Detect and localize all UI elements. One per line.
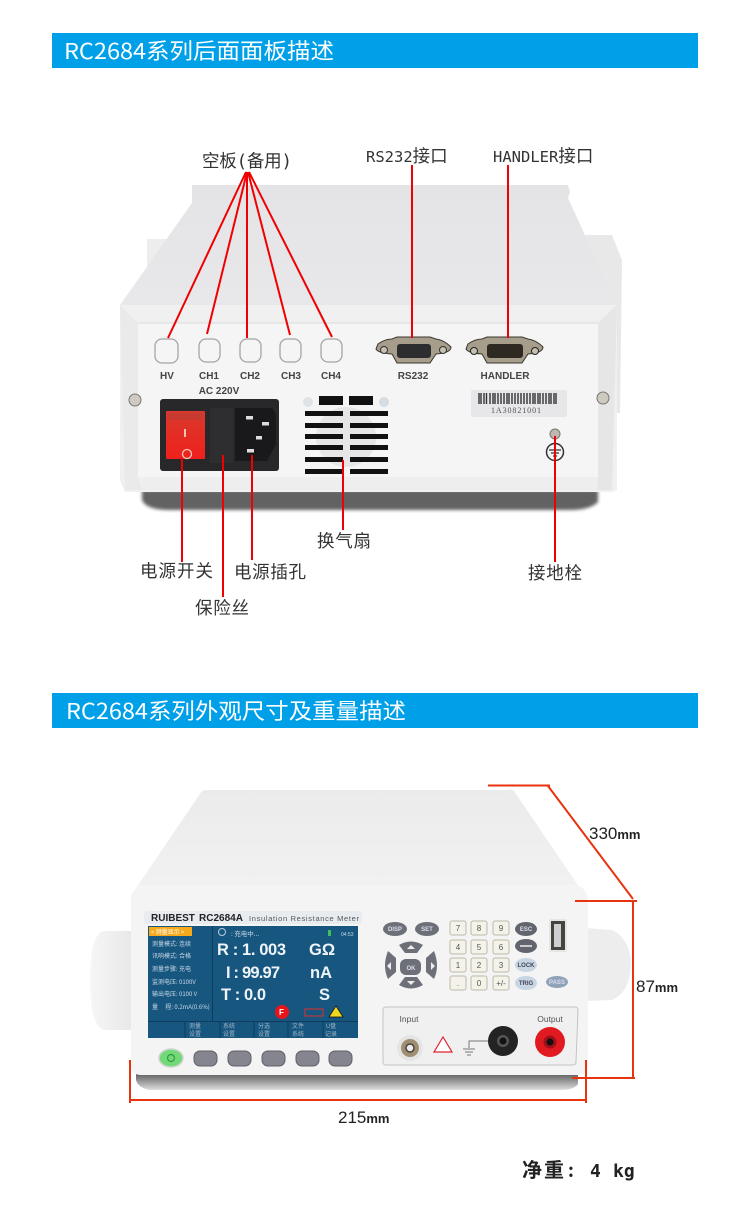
rear channel labels: CH4 (321, 371, 341, 382)
rear channel labels: CH3 (281, 371, 301, 382)
screen soft keys: U盘 (326, 1021, 336, 1030)
net weight: 4 (590, 1161, 601, 1182)
screen alarm icons (275, 1005, 343, 1019)
underside shadow (136, 1074, 578, 1090)
black terminal (488, 1026, 518, 1056)
screen soft keys: 系统 (223, 1021, 235, 1030)
rear view callout labels: 接地栓 (528, 564, 582, 584)
numeric keypad: 0 (477, 979, 482, 988)
power module (160, 399, 279, 471)
front face (120, 305, 617, 492)
rear view callout labels: 电源开关 (140, 562, 213, 582)
DISP and SET keys: DISP (388, 927, 402, 933)
rear view callout labels: 保险丝 (195, 599, 249, 619)
model strip: Insulation Resistance Meter (249, 914, 360, 923)
net weight: 净重 (522, 1154, 566, 1183)
numeric keypad: 7 (456, 924, 461, 933)
photo: instrument rear view (120, 185, 622, 510)
numeric keypad: +/- (496, 979, 506, 988)
rear channel labels: CH2 (240, 371, 260, 382)
top cover (120, 185, 617, 305)
screen soft keys: 记录 (325, 1029, 337, 1038)
rear channel labels: RS232 (398, 371, 429, 382)
rear channel labels: CH1 (199, 371, 219, 382)
ground symbol (463, 1041, 488, 1055)
screen side list: 量 程: 0.2mA(0.6%) (152, 1002, 210, 1011)
dimension labels (338, 824, 678, 1127)
red callout lines: rear view (168, 165, 555, 597)
numeric keypad: 1 (456, 961, 461, 970)
rear channel labels: HV (160, 371, 174, 382)
dimension lines (130, 786, 637, 1103)
right column keys: LOCK (518, 963, 535, 969)
right column keys: PASS (549, 980, 565, 986)
DISP and SET keys: SET (421, 927, 433, 933)
screen soft keys: 测量 (189, 1021, 201, 1030)
screen status line: 04:53 (341, 932, 354, 938)
numeric keypad: 3 (499, 961, 504, 970)
input/output panel: Output (537, 1014, 563, 1024)
numeric keypad: 5 (477, 943, 482, 952)
photo: instrument front view (90, 790, 631, 1090)
screen side list (152, 939, 210, 1011)
numeric keypad (450, 921, 509, 990)
underside shadow (142, 490, 598, 510)
dimension labels: 215mm (338, 1108, 390, 1127)
numeric keypad: . (457, 979, 459, 988)
rear view callout labels: 空板(备用) (202, 152, 292, 172)
dimension labels: 87mm (636, 977, 678, 996)
barcode label (471, 390, 567, 417)
ground terminal (546, 429, 564, 460)
screen soft keys: 系统 (292, 1029, 304, 1038)
numeric keypad: 8 (477, 924, 482, 933)
red terminal (535, 1027, 565, 1057)
net weight: kg (613, 1161, 635, 1182)
dimension labels: 330mm (589, 824, 640, 843)
RS232 connector (376, 337, 451, 363)
power button (159, 1049, 183, 1067)
LCD screen: < 测量显示 > (151, 927, 185, 936)
rear channel labels: AC 220V (199, 386, 240, 397)
screen soft keys (185, 1021, 337, 1038)
rear view callout labels: HANDLER接口 (493, 147, 593, 167)
screen side list: 讯响模式: 合格 (152, 951, 191, 960)
screen status tab (149, 927, 192, 936)
screen alarm icons: F (279, 1008, 284, 1017)
screen soft keys: 分选 (258, 1021, 270, 1030)
heading: rear panel (52, 33, 698, 68)
rear channel labels: HANDLER (481, 371, 530, 382)
screen readings (217, 941, 335, 1004)
numeric keypad: 9 (499, 924, 504, 933)
BNC input (397, 1035, 423, 1061)
screen side list: 测量模式: 连续 (152, 939, 191, 948)
screen side list: 输出电压: 0100 V (152, 989, 198, 998)
model strip: RC2684A (199, 913, 243, 924)
screen soft keys: 文件 (292, 1021, 304, 1030)
numeric keypad: 6 (499, 943, 504, 952)
rear view callout labels: RS232接口 (366, 147, 448, 167)
screen readings: I : 99.97 (226, 964, 280, 982)
LCD screen (148, 926, 358, 1038)
high voltage warning (434, 1037, 452, 1052)
net weight (522, 1154, 635, 1183)
connector holes (155, 339, 342, 363)
screen status line (218, 928, 354, 938)
top cover (130, 790, 586, 897)
heading: rear panel: RC2684系列后面面板描述 (64, 34, 334, 66)
right column keys: ESC (520, 927, 533, 933)
screen readings: R : 1. 003 (217, 941, 286, 959)
rear view callout labels (140, 147, 593, 619)
side handles (90, 931, 132, 1030)
screen side list: 测量步骤: 充电 (152, 964, 191, 973)
barcode label: 1A30821001 (491, 406, 541, 415)
heading: dimensions and weight (52, 693, 698, 728)
screen readings: GΩ (309, 941, 335, 959)
screen readings: nA (310, 964, 332, 982)
right column keys: TRIG (519, 981, 533, 987)
input/output panel: Input (400, 1014, 419, 1024)
rear handles (147, 239, 187, 279)
function buttons (194, 1051, 352, 1066)
screen soft keys: 设置 (223, 1029, 235, 1038)
rear view callout labels: 电源插孔 (234, 563, 306, 583)
input/output panel (383, 1007, 578, 1065)
USB port (549, 919, 567, 952)
screen readings: S (319, 986, 330, 1004)
rear channel labels (160, 371, 530, 397)
navigation pad (385, 942, 437, 988)
DISP and SET keys (383, 922, 439, 936)
screen side list: 监测电压: 0100V (152, 977, 196, 986)
numeric keypad: 4 (456, 943, 461, 952)
fan grille (284, 382, 389, 474)
numeric keypad: 2 (477, 961, 482, 970)
HANDLER connector (466, 337, 543, 363)
front panel (131, 885, 588, 1075)
net weight: : (568, 1157, 574, 1183)
screws (129, 392, 609, 406)
model strip (144, 911, 362, 924)
screen status line: : 充电中... (231, 928, 259, 938)
screen soft keys: 设置 (189, 1029, 201, 1038)
screen readings: T : 0.0 (221, 986, 266, 1004)
screen soft keys: 设置 (258, 1029, 270, 1038)
model strip: RUIBEST (151, 913, 195, 924)
rear view callout labels: 换气扇 (317, 532, 371, 552)
right column keys (515, 922, 568, 990)
navigation pad: OK (406, 966, 416, 972)
heading: dimensions and weight: RC2684系列外观尺寸及重量描述 (66, 694, 406, 726)
